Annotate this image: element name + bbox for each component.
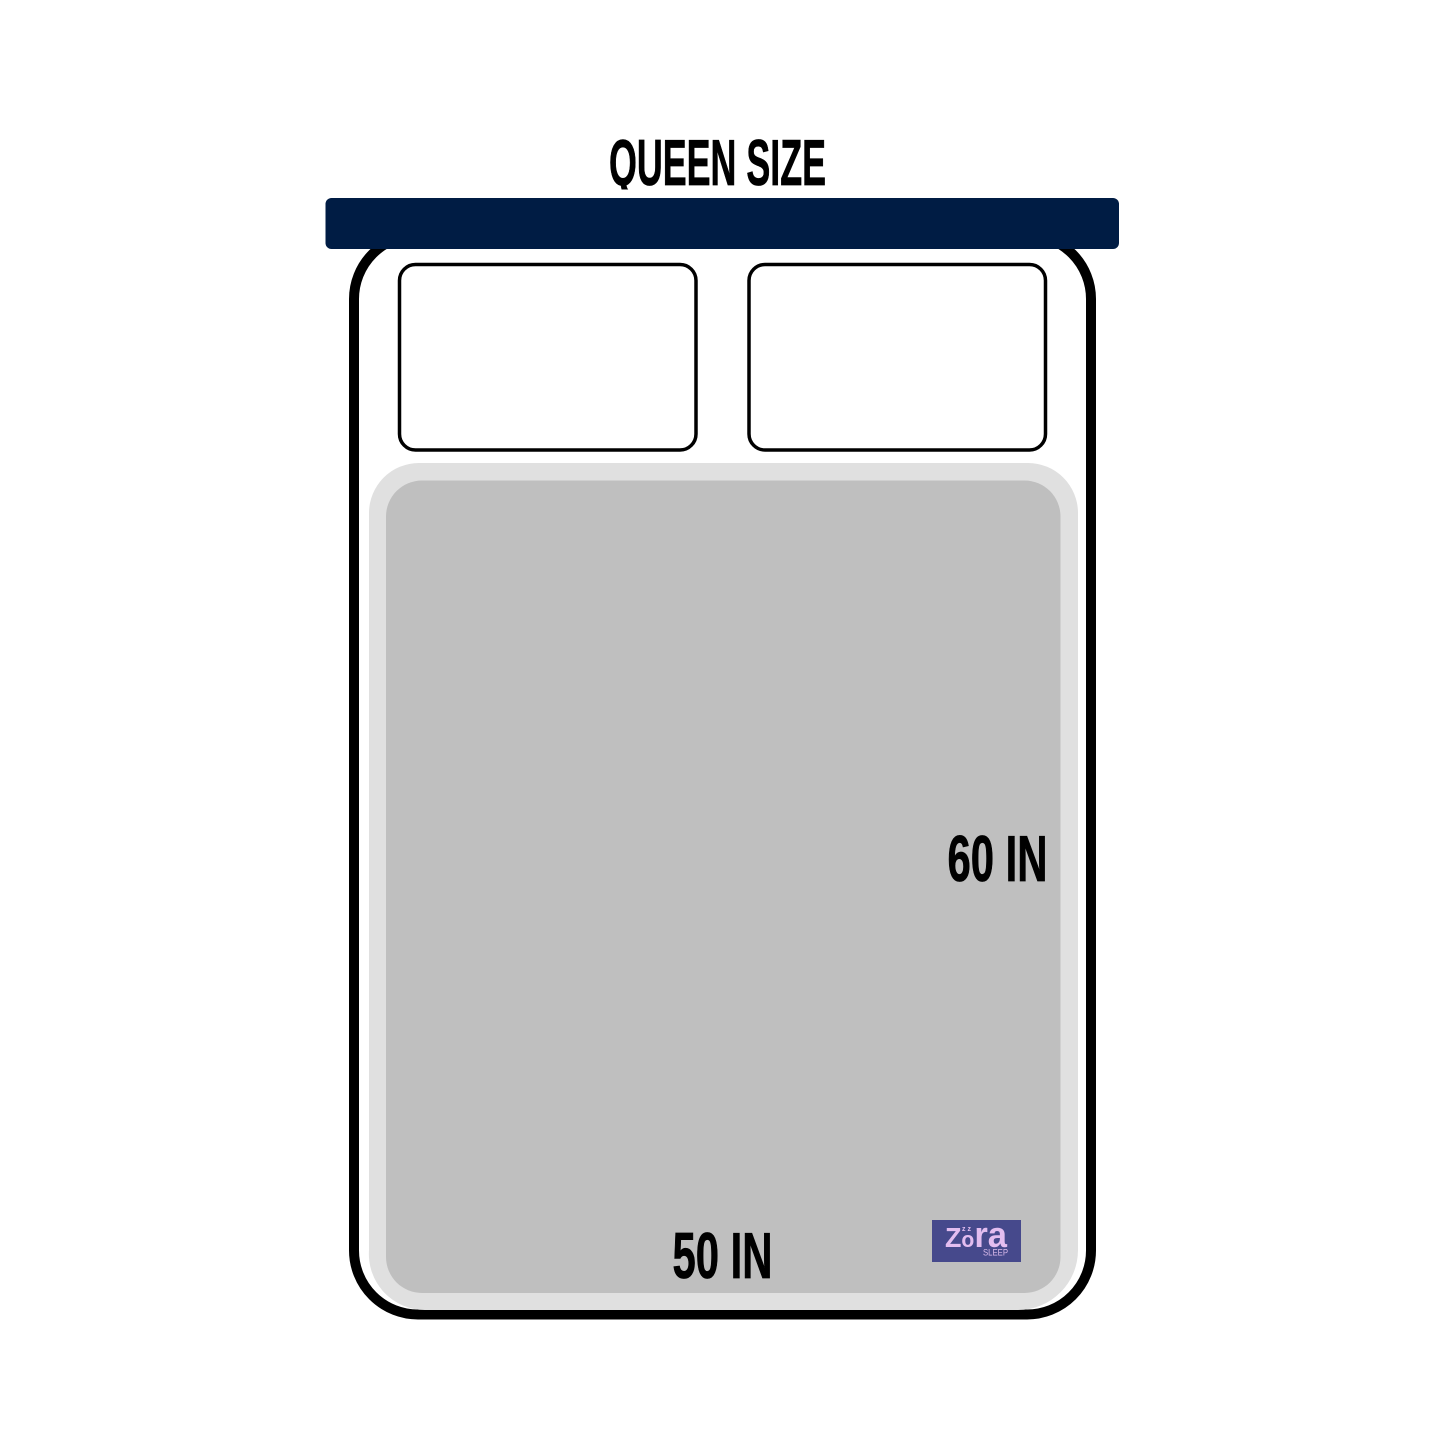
- bed frame outline: [354, 235, 1091, 1314]
- logo: Zora Sleep: [932, 1214, 1021, 1262]
- width label: 60 in: 60 IN: [948, 822, 1048, 895]
- logo: Zora Sleep: z z: [962, 1226, 971, 1233]
- headboard bar: [326, 198, 1119, 249]
- left pillow: [400, 264, 696, 450]
- title: QUEEN SIZE: [609, 126, 826, 199]
- logo: Zora Sleep: Zora: [945, 1214, 1008, 1255]
- length label: 50 in: 50 IN: [672, 1219, 772, 1292]
- blanket: outer light border: [369, 463, 1078, 1310]
- logo: Zora Sleep: SLEEP: [983, 1248, 1008, 1258]
- right pillow: [749, 264, 1046, 450]
- blanket: inner grey panel: [386, 480, 1060, 1293]
